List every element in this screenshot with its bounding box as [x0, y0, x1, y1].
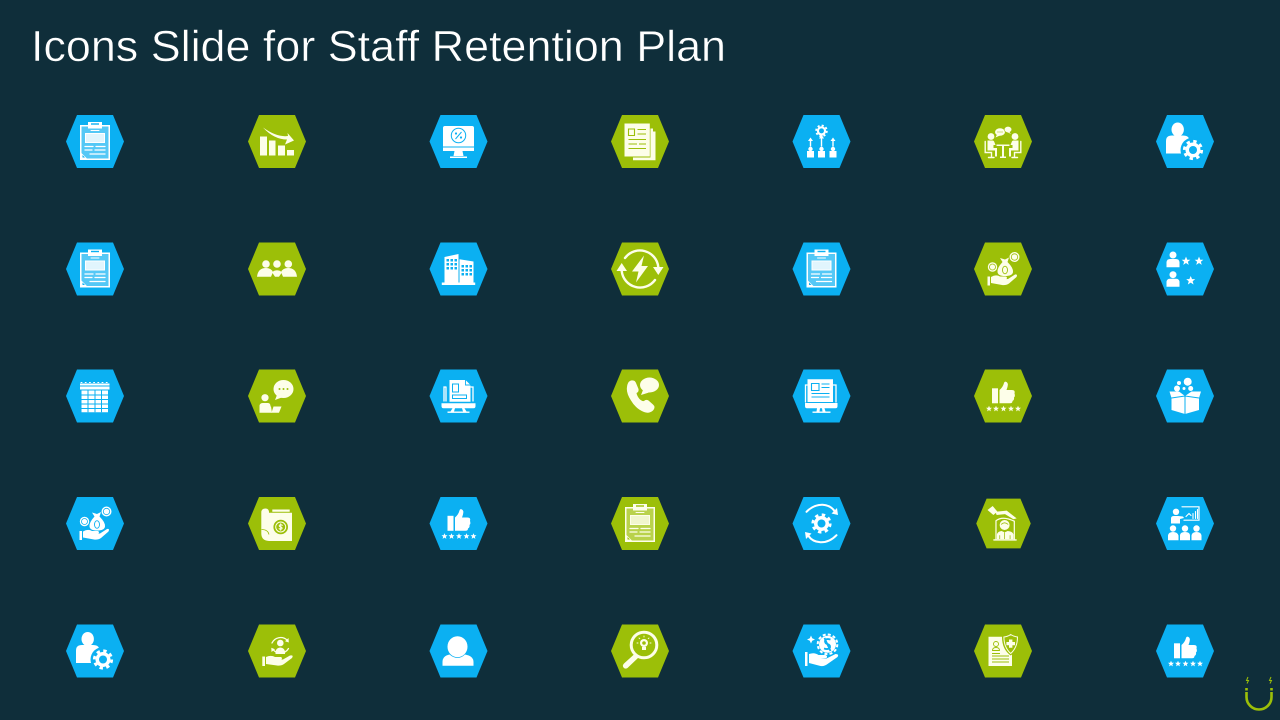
icon: monitor with news page [792, 370, 850, 422]
logo: green magnet [1246, 677, 1272, 710]
icon: clipboard report [611, 497, 669, 550]
icon: magnifier with light bulb [611, 624, 669, 678]
icon: office buildings [430, 242, 488, 296]
icon: money bag in hand [66, 497, 124, 550]
icon: thumbs up with stars [1156, 624, 1214, 678]
icon: user with gear [66, 624, 124, 678]
icon: hand with discount badge [792, 624, 850, 678]
icon: scroll with dollar coin [248, 497, 306, 550]
icon: clipboard report [66, 242, 124, 296]
icon: energy cycle [611, 242, 669, 296]
icon: team hierarchy with gear [792, 115, 850, 168]
icon: open box [1156, 370, 1214, 422]
icon grid [66, 115, 1214, 678]
icon: declining bar chart [248, 115, 306, 168]
icon: users with star ratings [1156, 242, 1214, 296]
icon: document stack [611, 115, 669, 168]
icon: money bag in hand [974, 242, 1032, 296]
title: Icons Slide for Staff Retention Plan [31, 22, 726, 71]
icon: hand with person cycle [248, 624, 306, 678]
icon: clipboard report [792, 242, 850, 296]
icon: insurance document with shield [974, 624, 1032, 678]
icon: presenter with audience [1156, 497, 1214, 550]
icon: user with gear [1156, 115, 1214, 168]
icon: gear with cycle arrows [792, 497, 850, 550]
icon: calendar [66, 370, 124, 422]
icon: clipboard report [66, 115, 124, 168]
icon: thumbs up with stars [974, 370, 1032, 422]
icon: monitor with percent [430, 115, 488, 168]
icon: thumbs up with stars [430, 497, 488, 550]
icon: user silhouette [430, 624, 488, 678]
icon: team of three [248, 242, 306, 296]
icon: monitor with document [430, 370, 488, 422]
icon: meeting at table [974, 115, 1032, 168]
icon: protected employee [976, 499, 1031, 548]
icon: phone with speech bubble [611, 370, 669, 422]
icon: user with chat bubble [248, 370, 306, 422]
